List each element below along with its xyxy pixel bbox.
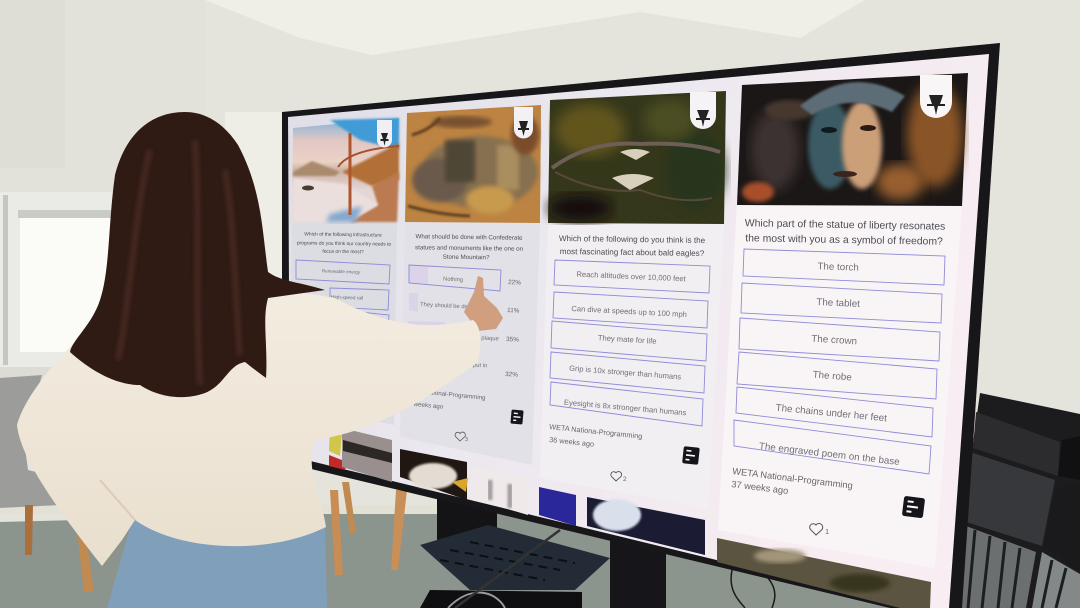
card 2 result bars: plaque [481, 336, 499, 342]
pin tab 2 [514, 107, 533, 138]
card 4 question [745, 218, 945, 248]
card 2 result bars: 22% [508, 279, 521, 287]
card 4 options: The engraved poem on the base [758, 441, 901, 468]
card 3 question: most fascinating fact about bald eagles? [560, 247, 705, 258]
hand [464, 276, 503, 331]
card 3 options: Reach altitudes over 10,000 feet [576, 270, 687, 283]
card 4 options: The torch [817, 261, 859, 274]
card 3 footer: 36 weeks ago [549, 435, 595, 449]
card 1 question: focus on the most? [322, 249, 364, 255]
card 3 options: They mate for life [598, 333, 657, 346]
card 1 options [296, 260, 390, 330]
pin tab 1 [377, 120, 392, 148]
card 1 question [297, 231, 391, 255]
stacked black cases on the right [950, 393, 1080, 608]
card 4 options: The robe [812, 369, 853, 384]
card 1 question: programs do you think our country needs to [297, 240, 391, 248]
lower row of cards on the screen [329, 428, 931, 608]
monitor stand and tray [420, 490, 775, 608]
card 4 image: Statue of Liberty portrait [737, 73, 968, 206]
card 4 footer [731, 466, 925, 536]
window on the left wall [0, 168, 128, 397]
poll card 1 [290, 118, 399, 425]
card 1 options: High-speed rail [331, 294, 363, 302]
card 4 options [734, 249, 945, 474]
pin tab 3 [690, 92, 716, 129]
card 4 footer: 37 weeks ago [731, 479, 789, 496]
poll card 4 [718, 73, 968, 568]
card 1 options: Renewable energy [322, 268, 361, 275]
card 2 question [415, 233, 524, 261]
card 2 result bars [408, 265, 521, 379]
jeans [107, 518, 327, 608]
card 2 footer [405, 387, 524, 443]
monitor bezel [282, 43, 1000, 608]
card 3 options: Eyesight is 8x stronger than humans [564, 398, 687, 417]
card 4 options: The tablet [816, 297, 860, 310]
card 2 result bars: 11% [507, 307, 520, 315]
card 2 result bars: They should be de [420, 302, 468, 310]
card 3 options: Can dive at speeds up to 100 mph [571, 304, 687, 319]
card 3 options: Grip is 10x stronger than humans [569, 364, 682, 381]
card 2 footer: WETA National-Programming [405, 387, 486, 402]
hair [70, 112, 325, 397]
card 4 question: Which part of the statue of liberty resonates [745, 218, 945, 233]
card 2 footer: 36 weeks ago [405, 400, 444, 411]
poll card 2 [400, 105, 541, 465]
card 2 result bars: Nothing [443, 276, 463, 284]
card 3 question: Which of the following do you think is the [559, 234, 706, 245]
screen surface [288, 54, 989, 608]
card 4 options: The crown [811, 334, 857, 347]
card 3 options [550, 260, 710, 426]
card 3 footer [549, 422, 700, 483]
chair on the left [0, 375, 407, 592]
card 2 image: Stone Mountain carving [405, 105, 541, 223]
card 2 footer: 3 [465, 437, 468, 443]
card 4 options: The chains under her feet [775, 403, 888, 424]
card 4 footer: 1 [825, 527, 829, 536]
card 1 image: Golden Gate Bridge [292, 118, 399, 222]
poll card 3 [540, 91, 726, 508]
card 3 footer: 2 [623, 476, 627, 483]
card 3 question [559, 234, 706, 258]
card 4 footer: WETA National-Programming [732, 466, 853, 491]
card 2 result bars: put in [473, 363, 487, 369]
card 3 image: bald eagle wings [548, 91, 726, 224]
card 1 question: Which of the following infrastructure [304, 231, 382, 239]
card 2 result bars: 32% [505, 371, 518, 379]
card 2 question: What should be done with Confederate [415, 233, 523, 242]
card 4 question: the most with you as a symbol of freedom? [745, 233, 943, 248]
sweater [17, 288, 480, 566]
woman pointing at the screen [17, 112, 503, 608]
pin tab 4 [920, 75, 952, 118]
card 3 footer: WETA Nationa-Programming [549, 422, 643, 441]
card 2 result bars: 35% [506, 336, 519, 344]
card 2 result bars: Add a hist [410, 327, 435, 334]
card 2 question: Stone Mountain? [443, 254, 490, 261]
card 2 question: statues and monuments like the one on [415, 244, 524, 253]
